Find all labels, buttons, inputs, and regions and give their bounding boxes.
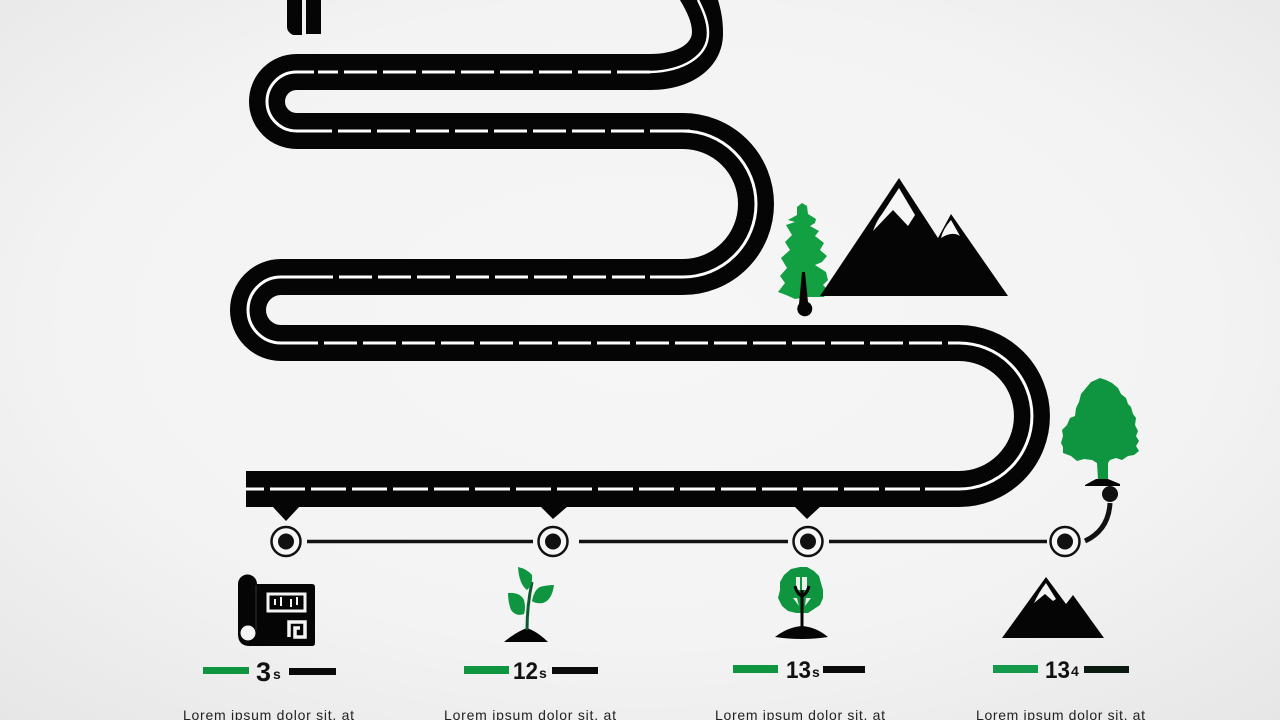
connector from node to tree: [1085, 486, 1118, 541]
stat: step 3: s: [812, 664, 820, 680]
timeline connectors: [307, 540, 1047, 543]
stat: step 4: 4: [1071, 663, 1079, 679]
icon: seedling: [504, 567, 554, 642]
icon: pine tree with trunk: [778, 203, 828, 316]
stat: step 4: 13: [1045, 657, 1070, 684]
winding road: [246, 0, 1032, 489]
stat: step 1: 3: [256, 657, 271, 687]
road start posts: [287, 0, 321, 35]
stat: step 3: [733, 657, 865, 684]
stat: step 2: [464, 658, 598, 685]
stat: step 1: s: [273, 666, 281, 682]
icon: large green tree: [1061, 378, 1139, 486]
stat: step 3: 13: [786, 657, 811, 684]
stat: step 2: s: [539, 665, 547, 681]
icon: large mountain: [820, 178, 1008, 296]
icon: round tree: [775, 567, 828, 639]
stat: step 4: [993, 657, 1129, 684]
stat: step 1: [203, 657, 336, 687]
icon: blueprint scroll: [238, 574, 315, 646]
timeline nodes: [272, 527, 1080, 556]
stat: step 2: 12: [513, 658, 538, 685]
icon: small mountain: [1002, 577, 1104, 638]
timeline pointers: [272, 506, 821, 521]
